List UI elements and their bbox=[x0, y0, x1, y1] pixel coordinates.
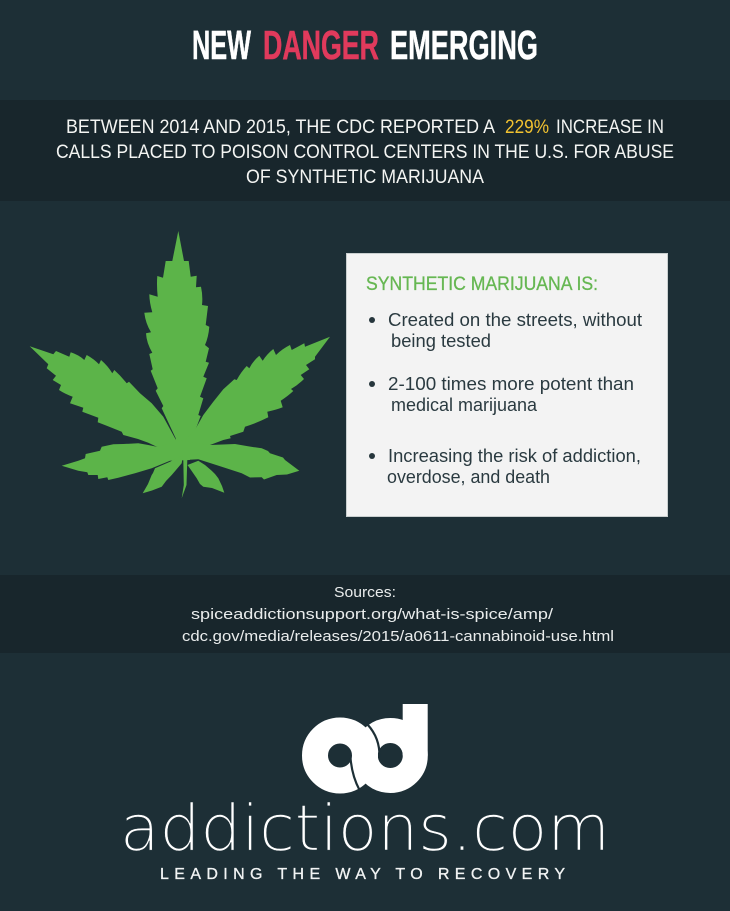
statistic text: INCREASE IN bbox=[556, 117, 664, 138]
bullet: more potent: medical marijuana bbox=[391, 395, 538, 415]
icon: cannabis leaf bbox=[30, 231, 330, 498]
bullet: created on the streets bbox=[369, 310, 642, 351]
title: DANGER bbox=[263, 22, 379, 68]
sources text: spiceaddictionsupport.org/what-is-spice/amp/ bbox=[191, 606, 554, 623]
logo: addictions.com bbox=[120, 704, 610, 883]
bullet: increasing risk: overdose, and death bbox=[387, 467, 550, 487]
bullet: more potent: 2-100 times more potent than bbox=[388, 374, 634, 394]
title: NEW bbox=[192, 22, 251, 68]
panel: sources band bbox=[0, 575, 730, 653]
bullet: increasing risk: Increasing the risk of addiction, bbox=[388, 446, 641, 466]
sources text bbox=[182, 584, 614, 645]
statistic text: 229% bbox=[505, 117, 549, 138]
statistic text: CALLS PLACED TO POISON CONTROL CENTERS IN THE U.S. FOR ABUSE bbox=[56, 142, 674, 163]
panel: statistic band bbox=[0, 100, 730, 201]
icon: ad infinity mark bbox=[315, 704, 428, 790]
panel heading: SYNTHETIC MARIJUANA IS: bbox=[366, 274, 598, 295]
statistic text: OF SYNTHETIC MARIJUANA bbox=[246, 167, 484, 188]
statistic text bbox=[56, 117, 674, 188]
tagline: LEADING THE WAY TO RECOVERY bbox=[160, 866, 565, 883]
bullet: increasing risk bbox=[369, 446, 641, 487]
title: EMERGING bbox=[390, 22, 538, 68]
bullet: created on the streets: Created on the streets, without bbox=[388, 310, 642, 330]
bullet: created on the streets: being tested bbox=[391, 331, 491, 351]
sources text: cdc.gov/media/releases/2015/a0611-cannabinoid-use.html bbox=[182, 628, 614, 645]
panel: synthetic marijuana definition bbox=[346, 254, 668, 516]
title bbox=[192, 22, 538, 68]
sources text: Sources: bbox=[334, 584, 396, 601]
statistic text: BETWEEN 2014 AND 2015, THE CDC REPORTED A bbox=[66, 117, 495, 138]
bullet: more potent bbox=[369, 374, 634, 415]
wordmark: addictions.com bbox=[120, 792, 610, 865]
